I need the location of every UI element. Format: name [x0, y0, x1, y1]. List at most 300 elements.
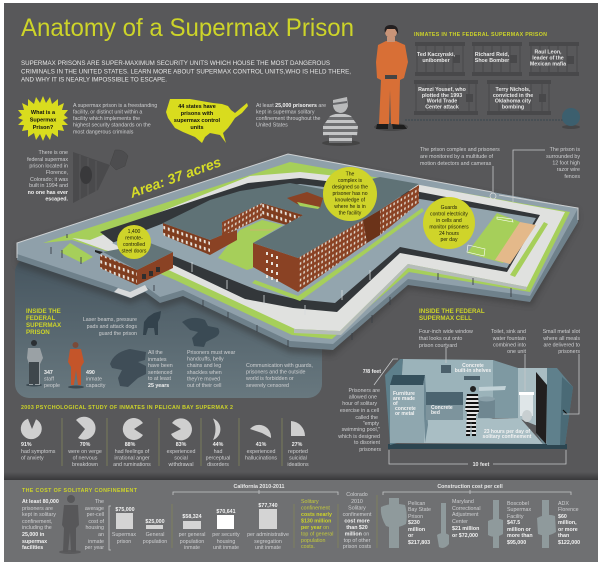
bar security housing inmate: housing [217, 539, 235, 545]
court [112, 184, 536, 303]
stat: staff: people [44, 383, 60, 389]
pie 41% [245, 425, 277, 462]
text: Maryland: Adjustment [452, 512, 479, 518]
text: communication: severely censored [246, 383, 289, 389]
icon: striped prisoner [322, 97, 360, 146]
wing front right [210, 230, 237, 255]
text: Boscobel: $47.5 [507, 520, 520, 526]
text: restraints: handcuffs, belly [187, 356, 224, 362]
text: ADX Florence: $60 [558, 514, 567, 520]
stat: staff: staff [44, 376, 54, 382]
gatehouse [95, 243, 173, 298]
text: Pelican Bay: or [408, 533, 413, 539]
text: california solitary cost: $130 million [301, 518, 331, 524]
cell: Ted Kaczynski: unibomber [422, 58, 450, 64]
pie 27%: ideations [287, 462, 309, 468]
green perimeter [43, 162, 570, 339]
text: communication: Communication with guards, [246, 363, 313, 369]
cell: Ramzi Yousef: Center attack [425, 104, 459, 110]
text: ADX Florence: or more [558, 527, 578, 533]
wing windows left [222, 203, 262, 236]
text: metal slot: Small metal slot [543, 329, 581, 335]
panel: lower slate area [15, 258, 322, 398]
intro text: AND WHY IT IS NEARLY IMPOSSIBLE TO ESCAPE. [21, 77, 167, 84]
badge: what is a supermax prison: Prison? [33, 125, 54, 131]
text: federal prison location: There is one [39, 150, 68, 156]
intro text: SUPERMAX PRISONS ARE SUPER-MAXIMUM SECURITY UNITS WHICH HOUSE THE MOST DANGEROUS [21, 60, 330, 67]
chart: per-cell cost bars [112, 507, 167, 545]
label: 23 hours: 23 hours per day of [484, 429, 530, 435]
text: metal slot: prisoners [558, 349, 580, 355]
pie 83%: 83% [176, 442, 187, 448]
icon: inmate figure [68, 342, 84, 388]
cell: Richard Reid: Shoe Bomber [475, 58, 509, 64]
pie 70%: breakdown [72, 462, 98, 468]
badge: what is a supermax prison [18, 96, 68, 141]
callout: complex design: designed so the [332, 184, 368, 190]
text: exercise: called the [355, 415, 378, 421]
text: california solitary cost: costs. [301, 544, 315, 550]
text: toilet: Toilet, sink and [491, 329, 526, 335]
text: sentences: inmates [148, 357, 167, 363]
label: width: 10 feet [473, 462, 490, 468]
pie 88%: had feelings of [115, 449, 150, 455]
text: supermax definition: facility, or distinct unit within a [73, 110, 142, 116]
text: fences: The prison is [550, 147, 580, 153]
main building block [163, 177, 419, 292]
text: colorado cost: Solitary [348, 506, 366, 512]
text: metal slot: are delivered to [543, 342, 580, 348]
text: california solitary cost: top of general [301, 532, 333, 538]
text: exercise: to disorient [354, 440, 381, 446]
callout: complex design: the facility [339, 210, 362, 216]
pie 44% [206, 418, 230, 468]
text: ADX Florence: Florence [558, 507, 579, 513]
lamp posts [51, 234, 511, 347]
text: exercise: which is designed [338, 434, 380, 440]
stat: capacity: inmate [86, 376, 102, 382]
heading: inmates: INMATES IN THE FEDERAL SUPERMAX PRISON [414, 32, 547, 38]
callout: complex design [323, 167, 377, 221]
text: exercise: prisoners [359, 447, 381, 453]
text: per-cell cost: cost of [88, 519, 105, 525]
platform [17, 154, 578, 356]
text: colorado cost: confinement [343, 512, 372, 518]
text: colorado cost: than $20 [346, 525, 368, 531]
wing windows right [262, 203, 303, 226]
cell dimension lines [374, 347, 579, 464]
pie 83%: social [174, 456, 188, 462]
bar security housing inmate: $70,641 [216, 509, 236, 515]
pie 44%: perceptual [206, 456, 230, 462]
callout: complex design: The [346, 172, 355, 178]
roof [163, 177, 419, 258]
bed [426, 392, 463, 420]
text: colorado cost: cost more [344, 518, 370, 524]
cell: Ted Kaczynski [415, 42, 465, 76]
text: supermax definition: facility which implements the [73, 116, 140, 122]
bar administrative segregation inmate: $77,740 [258, 503, 278, 509]
pie 44%: 44% [213, 442, 224, 448]
callout: guards: in cells and [436, 218, 462, 224]
callout: guards: control electricity [430, 212, 468, 218]
callout: guards: Guards [441, 205, 458, 211]
cell: Ramzi Yousef [414, 80, 478, 115]
cell: Terry Nichols: bombing [502, 104, 524, 110]
white wall [72, 172, 565, 331]
text: ADX Florence: million, [558, 520, 577, 526]
text: california solitary cost: on [322, 525, 329, 531]
icon: fist on bar, Pelican Bay [381, 498, 407, 548]
text: federal prison location: built in 1994 and [29, 183, 68, 189]
cell: Ramzi Yousef: World Trade [427, 98, 457, 104]
text: Maryland: or $72,000 [452, 533, 478, 539]
map: 44 states [166, 99, 248, 143]
heading: california [173, 484, 338, 495]
text: monitoring: The prison complex and prisoners [420, 147, 500, 153]
text: window: Four-inch wide window [419, 329, 473, 335]
bar supermax prison [112, 507, 136, 545]
label: furniture: concrete [395, 406, 416, 412]
text: per-cell cost: per year [85, 545, 104, 551]
small inner court [287, 192, 323, 208]
text: sentences: All the [148, 350, 163, 356]
pie 41%: experienced [247, 449, 275, 455]
gap [363, 210, 380, 243]
text: exercise: swimming pool," [342, 427, 380, 433]
text: colorado cost: million on [345, 532, 369, 538]
text: communication: prisoners and the outside [246, 370, 306, 376]
pie 91%: had symptoms [21, 449, 56, 455]
text: 80,000 prisoners: including the [22, 525, 52, 531]
text: 80,000 prisoners: At least 80,000 [22, 499, 59, 505]
icon: fist on bar, Maryland [437, 503, 449, 548]
text: sentences: 25 years [148, 383, 169, 389]
stat: capacity: 490 [86, 370, 95, 376]
dividers [172, 495, 377, 548]
text: Maryland: $21 million [452, 526, 479, 532]
shelves [464, 376, 506, 391]
text: federal prison location: prison located in [29, 164, 68, 170]
callout: complex design: where he is in [334, 204, 366, 210]
text: Pelican Bay: Pelican [408, 501, 425, 507]
label: furniture: of [393, 401, 398, 407]
text: 25,000 prisoners: At least [256, 103, 275, 109]
icon: fist on bar, ADX [537, 500, 556, 548]
text: federal prison location: Florence, [46, 170, 68, 176]
text: laser beams: guard the prison [99, 331, 137, 337]
callout: steel doors: 1,400 [128, 229, 141, 235]
bar general population inmate [179, 514, 205, 551]
icon: ball and chain [405, 108, 580, 129]
icon: fist and bars [73, 150, 128, 203]
heading: inside the federal supermax prison: FEDERAL [26, 315, 55, 322]
text: Boscobel: $95,000 [507, 540, 526, 546]
pie 41%: hallucinations [245, 456, 277, 462]
map: 44 states: supermax control [174, 118, 221, 124]
text: metal slot: where all meals [543, 336, 580, 342]
text: 25,000 prisoners: United States [256, 122, 288, 128]
bar security housing inmate: unit inmate [213, 545, 239, 551]
pie 70%: 70% [80, 442, 91, 448]
dark road [100, 178, 540, 312]
text: per-cell cost: an [98, 532, 104, 538]
label: furniture: are made [393, 396, 415, 402]
text: 80,000 prisoners: facilities [22, 545, 43, 551]
label: bed: bed [431, 410, 440, 416]
text: exercise: "empty [363, 421, 379, 427]
right green strip [510, 222, 548, 277]
meal slot [563, 410, 567, 414]
pie 88%: 88% [125, 442, 136, 448]
text: toilet: water fountain [493, 336, 526, 342]
cell illustration [385, 359, 573, 449]
wing front left [163, 223, 210, 255]
text: 80,000 prisoners: supermax [22, 539, 47, 545]
map: 44 states: units [190, 125, 204, 131]
text: california solitary cost: population [301, 538, 326, 544]
cell: Ramzi Yousef: Ramzi Yousef, who [418, 87, 467, 93]
text: ADX Florence: ADX [558, 501, 569, 507]
bar general population: $25,000 [145, 519, 165, 525]
pie 70%: of nervous [73, 456, 98, 462]
callout: steel doors: steel doors [122, 248, 147, 254]
callout: complex design: complex is [338, 178, 362, 184]
label: furniture: or metal [395, 411, 415, 417]
bar general population inmate: per general [179, 532, 205, 538]
text: exercise: Prisoners are [348, 388, 380, 394]
bar administrative segregation inmate: segregation [254, 539, 282, 545]
pie 44%: disorders [207, 462, 229, 468]
title: Anatomy of a Supermax Prison [21, 14, 354, 42]
text: communication: world is forbidden or [246, 376, 294, 382]
text: Pelican Bay: million [408, 527, 425, 533]
pie 91%: of anxiety [21, 456, 44, 462]
callout: complex design: knowledge of [335, 198, 366, 204]
heading: inside the federal supermax prison: INSIDE THE [26, 308, 61, 315]
text: supermax definition: highest security standards on the [73, 122, 151, 128]
courtyard lawn [218, 220, 283, 270]
pie 70% [68, 417, 102, 468]
pie 91% [21, 419, 56, 462]
text: Maryland: Center [452, 519, 468, 525]
text: federal prison location: federal supermax [27, 157, 68, 163]
court lights [192, 262, 370, 315]
text: Maryland: Maryland [452, 499, 474, 505]
text: Boscobel: Supermax [507, 507, 531, 513]
callout: steel doors: remote- [125, 236, 143, 242]
pie 41%: 41% [256, 442, 267, 448]
heading: construction cost [383, 484, 571, 495]
text: monitoring: are monitored by a multitude of [420, 154, 494, 160]
heading: psychological study: 2003 PSYCHOLOGICAL STUDY OF INMATES IN PELICAN BAY SUPERMAX 2 [21, 405, 233, 411]
text: restraints: they're moved [187, 376, 220, 382]
callout: guards: monitor prisoners [429, 224, 469, 230]
text: Maryland: Correctional [452, 506, 481, 512]
pie 70%: were on verge [68, 449, 102, 455]
text: california solitary cost: per year [301, 525, 322, 531]
icon: shackled hands [182, 318, 219, 347]
text: Boscobel: Boscobel [507, 501, 529, 507]
text: california solitary cost: Solitary [301, 499, 319, 505]
badge: what is a supermax prison: Supermax [30, 118, 57, 124]
cell: Ramzi Yousef: plotted the 1993 [422, 93, 462, 99]
bar general population inmate: population [180, 539, 204, 545]
heading: inside the supermax cell: INSIDE THE FEDERAL [419, 308, 485, 315]
prison complex illustration [17, 154, 578, 356]
lawn along main building [252, 208, 424, 301]
text: 25,000 prisoners: confinement throughout the [256, 116, 321, 122]
text: sentences: sentenced [148, 370, 172, 376]
pie 88%: irrational anger [114, 456, 150, 462]
heading: cost of solitary: THE COST OF SOLITARY CONFINEMENT [22, 488, 138, 494]
icon: fist on bar, Boscobel [488, 500, 503, 548]
map: 44 states: 44 states have [178, 104, 216, 110]
text: fences: razor wire [557, 167, 580, 173]
heading: inside the federal supermax prison: PRISON [26, 329, 50, 336]
badge: what is a supermax prison: What is a [31, 110, 56, 116]
text: 80,000 prisoners: prisoners are [22, 506, 53, 512]
green lawn left [60, 243, 93, 263]
text: window: prison courtyard [419, 343, 457, 349]
text: california solitary cost: costs nearly [301, 512, 332, 518]
text: restraints: Prisoners must wear [187, 350, 236, 356]
bar administrative segregation inmate: unit inmate [255, 545, 281, 551]
text: supermax definition: A supermax prison is a freestanding [73, 103, 157, 109]
bracket [109, 506, 111, 550]
text: exercise: hour of solitary [342, 401, 377, 407]
label: height: 7/8 feet [363, 369, 381, 375]
bar general population: General [146, 532, 164, 538]
icon: staff officer [26, 340, 43, 386]
text: per-cell cost: housing [85, 525, 104, 531]
label: 23 hours: solitary confinement [483, 434, 532, 440]
heading: inside the supermax cell: SUPERMAX CELL [419, 315, 472, 322]
text: Pelican Bay: $230 [408, 520, 420, 526]
furniture block [390, 375, 428, 443]
text: laser beams: pads and attack dogs [87, 324, 137, 330]
text: supermax definition: most dangerous criminals [73, 130, 134, 136]
fence line [17, 154, 492, 258]
leader lines [490, 150, 545, 202]
pie 27%: reported [288, 449, 308, 455]
text: Pelican Bay: Bay State [408, 507, 431, 513]
text: colorado cost: 2010 [351, 499, 363, 505]
cell window [441, 365, 451, 373]
cell: Terry Nichols: convicted in the [493, 93, 533, 99]
icon: hands [110, 349, 146, 387]
text: federal prison location: escaped. [45, 196, 69, 202]
label: shelves: Concrete [462, 363, 484, 369]
heading: inside the federal supermax prison: SUPERMAX [26, 322, 62, 329]
text: Boscobel: Facility [507, 514, 524, 520]
icon: silhouette [59, 495, 81, 554]
icon: guard dog [143, 311, 161, 335]
cell: Raul Leon: Raul Leon, [534, 50, 562, 56]
big left face [253, 243, 298, 292]
text: ADX Florence: than [558, 533, 569, 539]
cell door [536, 372, 547, 444]
text: 25,000 prisoners: 25,000 prisoners are [275, 103, 326, 109]
bar supermax prison: $75,000 [115, 507, 135, 513]
text: colorado cost: Colorado [346, 492, 368, 498]
callout: guards: 24 hours [439, 231, 459, 237]
pie 88%: and ruminations [113, 462, 151, 468]
text: toilet: combined into [493, 342, 526, 348]
cell: Richard Reid [472, 42, 522, 76]
bar security housing inmate [212, 509, 240, 551]
bar administrative segregation inmate [247, 503, 289, 551]
cell: Terry Nichols: Oklahoma city [495, 98, 531, 104]
pie 27% [287, 421, 309, 468]
pie 83%: experienced [167, 449, 195, 455]
pie 83% [167, 418, 195, 468]
cell: Terry Nichols: Terry Nichols, [496, 87, 531, 93]
cell: Raul Leon [529, 42, 579, 76]
text: Pelican Bay: $217,803 [408, 540, 430, 546]
bar general population inmate: inmate [184, 545, 200, 551]
cell: Richard Reid: Richard Reid, [475, 52, 510, 58]
text: Boscobel: million or [507, 527, 531, 533]
stat: capacity: capacity [86, 383, 106, 389]
bar security housing inmate: per security [212, 532, 240, 538]
bar supermax prison: Supermax [112, 532, 136, 538]
text: per-cell cost: average [85, 506, 104, 512]
cell: Raul Leon: leader of the [532, 56, 564, 62]
text: Boscobel: more than [507, 533, 533, 539]
text: monitoring: motion detectors and cameras [420, 161, 492, 167]
text: exercise: exercise in a cell [340, 408, 379, 414]
text: sentences: have been [148, 363, 173, 369]
text: 25,000 prisoners: kept in supermax solitary [256, 110, 315, 116]
callout: complex design: prisoner has no [332, 191, 368, 197]
text: 80,000 prisoners: 25,000 in [22, 532, 44, 538]
toilet [519, 392, 534, 422]
pie 27%: 27% [292, 442, 303, 448]
far right face [380, 185, 419, 235]
bar supermax prison: prison [117, 539, 131, 545]
cell: Raul Leon: Mexican mafia [530, 62, 566, 68]
callout: guards: per day [440, 237, 458, 243]
text: ADX Florence: $122,000 [558, 540, 580, 546]
map: 44 states: prisons with [181, 111, 214, 117]
bar administrative segregation inmate: per administrative [247, 532, 289, 538]
text: fences: 12 foot high [552, 160, 580, 166]
cell: Terry Nichols [487, 80, 551, 115]
text: sentences: to at least [148, 376, 171, 382]
label: furniture: Furniture [393, 391, 415, 397]
bar general population: population [143, 539, 167, 545]
callout: steel doors [117, 225, 151, 259]
text: per-cell cost: per-cell [87, 512, 104, 518]
text: Pelican Bay: Prison [408, 514, 423, 520]
text: colorado cost: prison costs [343, 544, 371, 550]
text: toilet: one unit [507, 349, 527, 355]
text: restraints: shackles when [187, 370, 222, 376]
striped prisoner [465, 386, 479, 436]
text: per-cell cost: The [95, 499, 104, 505]
label: bed: Concrete [431, 405, 453, 411]
label: area: Area: 37 acres [127, 153, 223, 201]
pie 83%: withdrawal [168, 462, 194, 468]
pie 91%: 91% [21, 442, 32, 448]
panel: inmate cells [414, 42, 579, 115]
text: 80,000 prisoners: kept in solitary [22, 512, 56, 518]
text: colorado cost: top of other [344, 538, 371, 544]
icon: orange inmate [374, 25, 408, 131]
label: shelves: built-in shelves [455, 368, 491, 374]
text: restraints: out of their cell [187, 383, 221, 389]
